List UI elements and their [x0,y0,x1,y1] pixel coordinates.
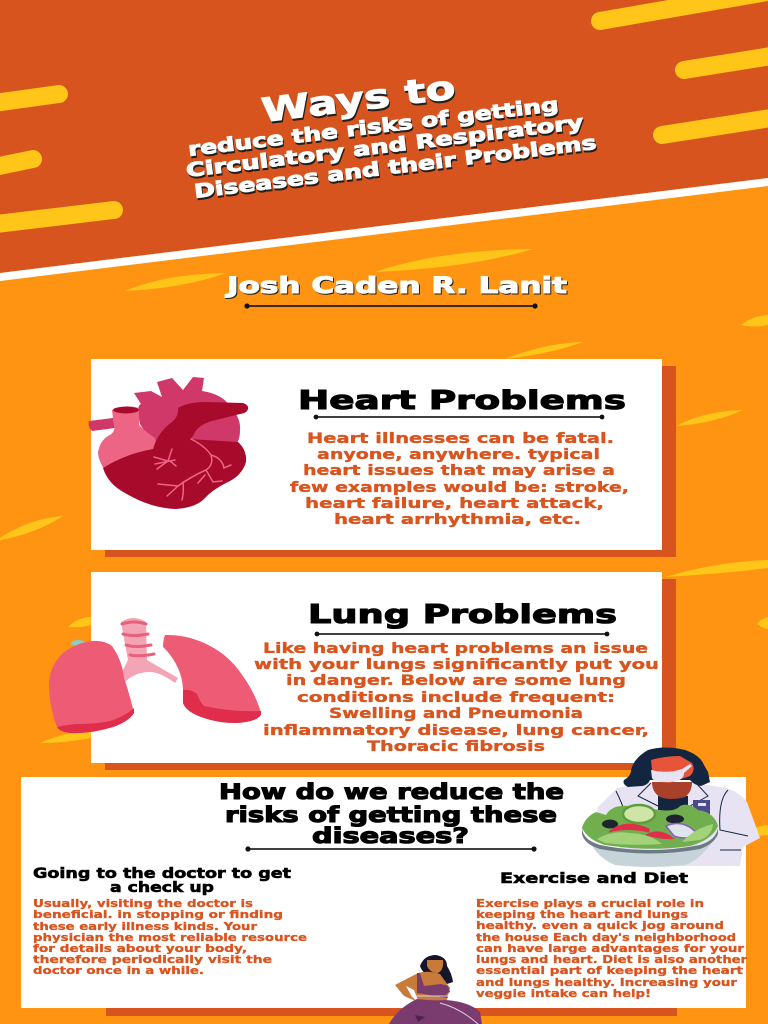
text: lung description: Like having heart problems an issue [263,641,648,657]
title: Diseases and their Problems [193,132,598,203]
yellow background streaks [0,249,768,836]
text: doctor description [33,898,307,977]
subheading: doctor check up: Going to the doctor to get [33,866,291,882]
text: doctor description: therefore periodically visit the [33,954,272,966]
text: heart description: few examples would be: stroke, [290,480,629,496]
illustration: doctor with salad bowl [582,748,760,867]
panel: lung problems [49,572,676,770]
subheading: doctor check up: a check up [110,880,214,896]
text: exercise description: healthy. even a quick jog around [476,920,724,932]
text: exercise description: and lungs healthy. Increasing your [476,977,738,989]
subheading: exercise and diet: Exercise and Diet [500,871,688,887]
text: doctor description: these early illness kinds. Your [33,921,258,933]
author divider [244,303,538,309]
author name: Josh Caden R. Lanit [224,274,568,299]
text: exercise description: the house Each day's neighborhood [476,932,736,944]
icon: lungs [49,618,261,733]
heading: how do we reduce [219,780,564,848]
title [185,67,598,203]
text: heart description: heart arrhythmia, etc. [334,512,581,528]
illustration: woman exercising [389,955,482,1024]
title: Circulatory and Respiratory [185,111,585,182]
text: exercise description [476,898,748,1000]
header band [0,0,768,281]
heart vessels [154,439,231,500]
text: lung description: conditions include frequent: [297,690,615,706]
heading: how do we reduce: risks of getting these [225,803,557,827]
text: doctor description: doctor once in a while. [33,965,204,977]
text: heart description: heart failure, heart attack, [305,496,604,512]
lung divider [315,632,609,636]
subheading: doctor check up [33,866,291,896]
text: doctor description: for details about your body, [33,943,247,955]
text: heart description: anyone, anywhere. typical [317,447,600,463]
text: doctor description: Usually, visiting the doctor is [33,898,253,910]
text: lung description: in danger. Below are some lung [286,673,626,689]
text: lung description [254,641,659,755]
heading: lung problems: Lung Problems [308,600,617,630]
text: exercise description: can have large advantages for your [476,943,745,955]
icon: heart [88,377,248,509]
text: exercise description: veggie intake can help! [476,988,651,1000]
panel: heart problems [88,359,676,557]
text: doctor description: beneficial. in stopping or finding [33,909,283,921]
text: exercise description: Exercise plays a crucial role in [476,898,704,910]
text: heart description: Heart illnesses can be fatal. [307,431,614,447]
text: exercise description: lungs and heart. Diet is also another [476,954,748,966]
panel: how do we reduce [21,777,748,1016]
heart divider [314,415,604,419]
text: lung description: with your lungs significantly put you [254,657,659,673]
text: heart description [290,431,629,528]
text: exercise description: keeping the heart and lungs [476,909,688,921]
heading: heart problems: Heart Problems [298,386,626,416]
text: heart description: heart issues that may arise a [303,463,615,479]
title: Ways to [259,67,458,130]
heading: how do we reduce: How do we reduce the [219,780,564,804]
text: exercise description: essential part of keeping the heart [476,965,743,977]
text: lung description: Swelling and Pneumonia [329,706,583,722]
text: lung description: inflammatory disease, lung cancer, [263,723,649,739]
text: doctor description: physician the most reliable resource [33,932,307,944]
text: lung description: Thoracic fibrosis [367,739,545,755]
title: reduce the risks of getting [187,94,560,161]
heading: how do we reduce: diseases? [312,824,469,848]
reduce divider [245,846,537,852]
yellow pills on header [0,0,768,226]
